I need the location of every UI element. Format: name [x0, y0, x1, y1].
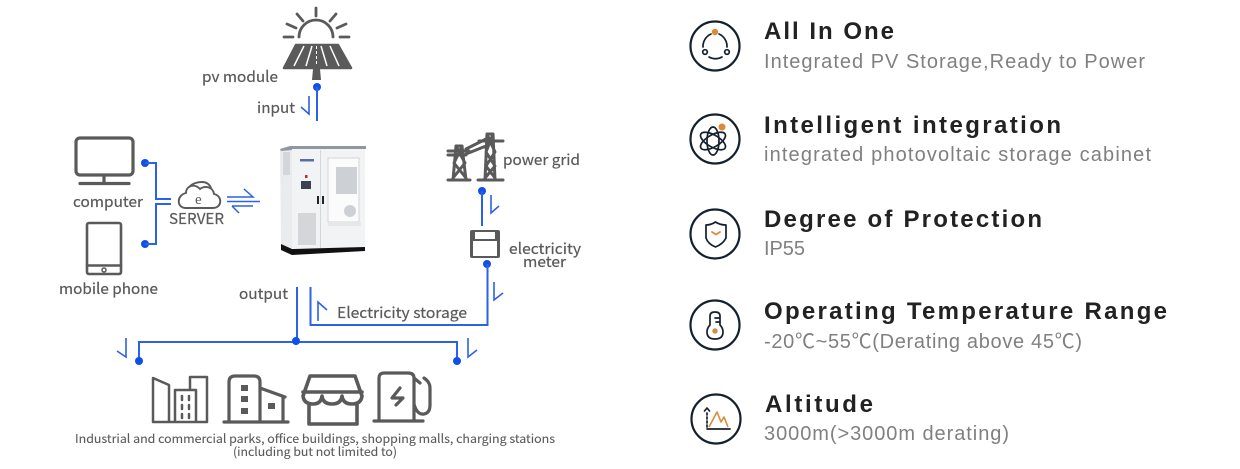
heading: All In One	[764, 18, 894, 45]
text: application scenarios: Industrial and commercial parks, office buildings, shopping malls, charging stations	[75, 430, 555, 447]
description: IP55	[764, 238, 805, 260]
icon: atom	[690, 114, 740, 164]
description: -20℃~55℃(Derating above 45℃)	[764, 331, 1082, 353]
connector: meter to storage	[310, 260, 503, 325]
description: 3000m(>3000m derating)	[764, 423, 1009, 445]
icon: mountain altitude	[692, 394, 740, 444]
feature: Operating Temperature Range	[690, 298, 1167, 353]
heading: Altitude	[765, 391, 873, 418]
text: application scenarios: (including but not limited to)	[233, 443, 397, 460]
heading: Degree of Protection	[764, 206, 1042, 233]
feature: Degree of Protection	[690, 206, 1042, 260]
label: mobile phone: mobile phone	[59, 278, 158, 299]
icon: computer	[76, 138, 133, 184]
feature: All In One	[690, 18, 1145, 73]
text: application scenarios	[75, 430, 555, 460]
icon: mobile phone	[87, 223, 121, 274]
label: electricity meter: meter	[523, 251, 566, 272]
label: Electricity storage: Electricity storage	[337, 302, 467, 323]
icon: all in one ring	[690, 22, 740, 70]
heading: Intelligent integration	[764, 112, 1061, 139]
feature: Altitude	[692, 391, 1009, 445]
description: integrated photovoltaic storage cabinet	[764, 144, 1151, 166]
icon: shield	[690, 210, 740, 258]
label: output: output	[239, 283, 288, 304]
icon: solar panel with sun	[284, 8, 351, 80]
label: electricity meter	[509, 238, 581, 272]
feature: Intelligent integration	[690, 112, 1151, 166]
label: power grid: power grid	[503, 149, 580, 170]
heading: Operating Temperature Range	[764, 298, 1167, 325]
connector: grid to meter	[478, 187, 499, 226]
icon: electricity meter	[470, 230, 500, 258]
icon: office building	[224, 376, 288, 422]
connector: devices to server	[141, 159, 171, 248]
icon: exchange arrows	[227, 189, 260, 213]
connector: output distribution	[117, 287, 477, 365]
panel: system diagram	[59, 8, 581, 460]
icon: thermometer	[690, 300, 740, 350]
description: Integrated PV Storage,Ready to Power	[764, 51, 1145, 73]
image: storage cabinet	[280, 146, 366, 255]
label: SERVER: SERVER	[169, 208, 224, 229]
icon: power grid towers	[448, 134, 503, 180]
panel: features list	[690, 18, 1167, 445]
label: pv module: pv module	[202, 66, 278, 87]
icon: server cloud: e	[195, 192, 202, 208]
icon: shopping mall	[303, 376, 362, 424]
label: computer: computer	[73, 191, 143, 212]
icon: industrial park	[153, 377, 207, 422]
label: input: input	[257, 97, 295, 118]
label: electricity meter: electricity	[509, 238, 581, 259]
icon: charging station	[374, 373, 430, 421]
connector: input line	[301, 83, 321, 121]
icon: server cloud	[179, 182, 220, 208]
